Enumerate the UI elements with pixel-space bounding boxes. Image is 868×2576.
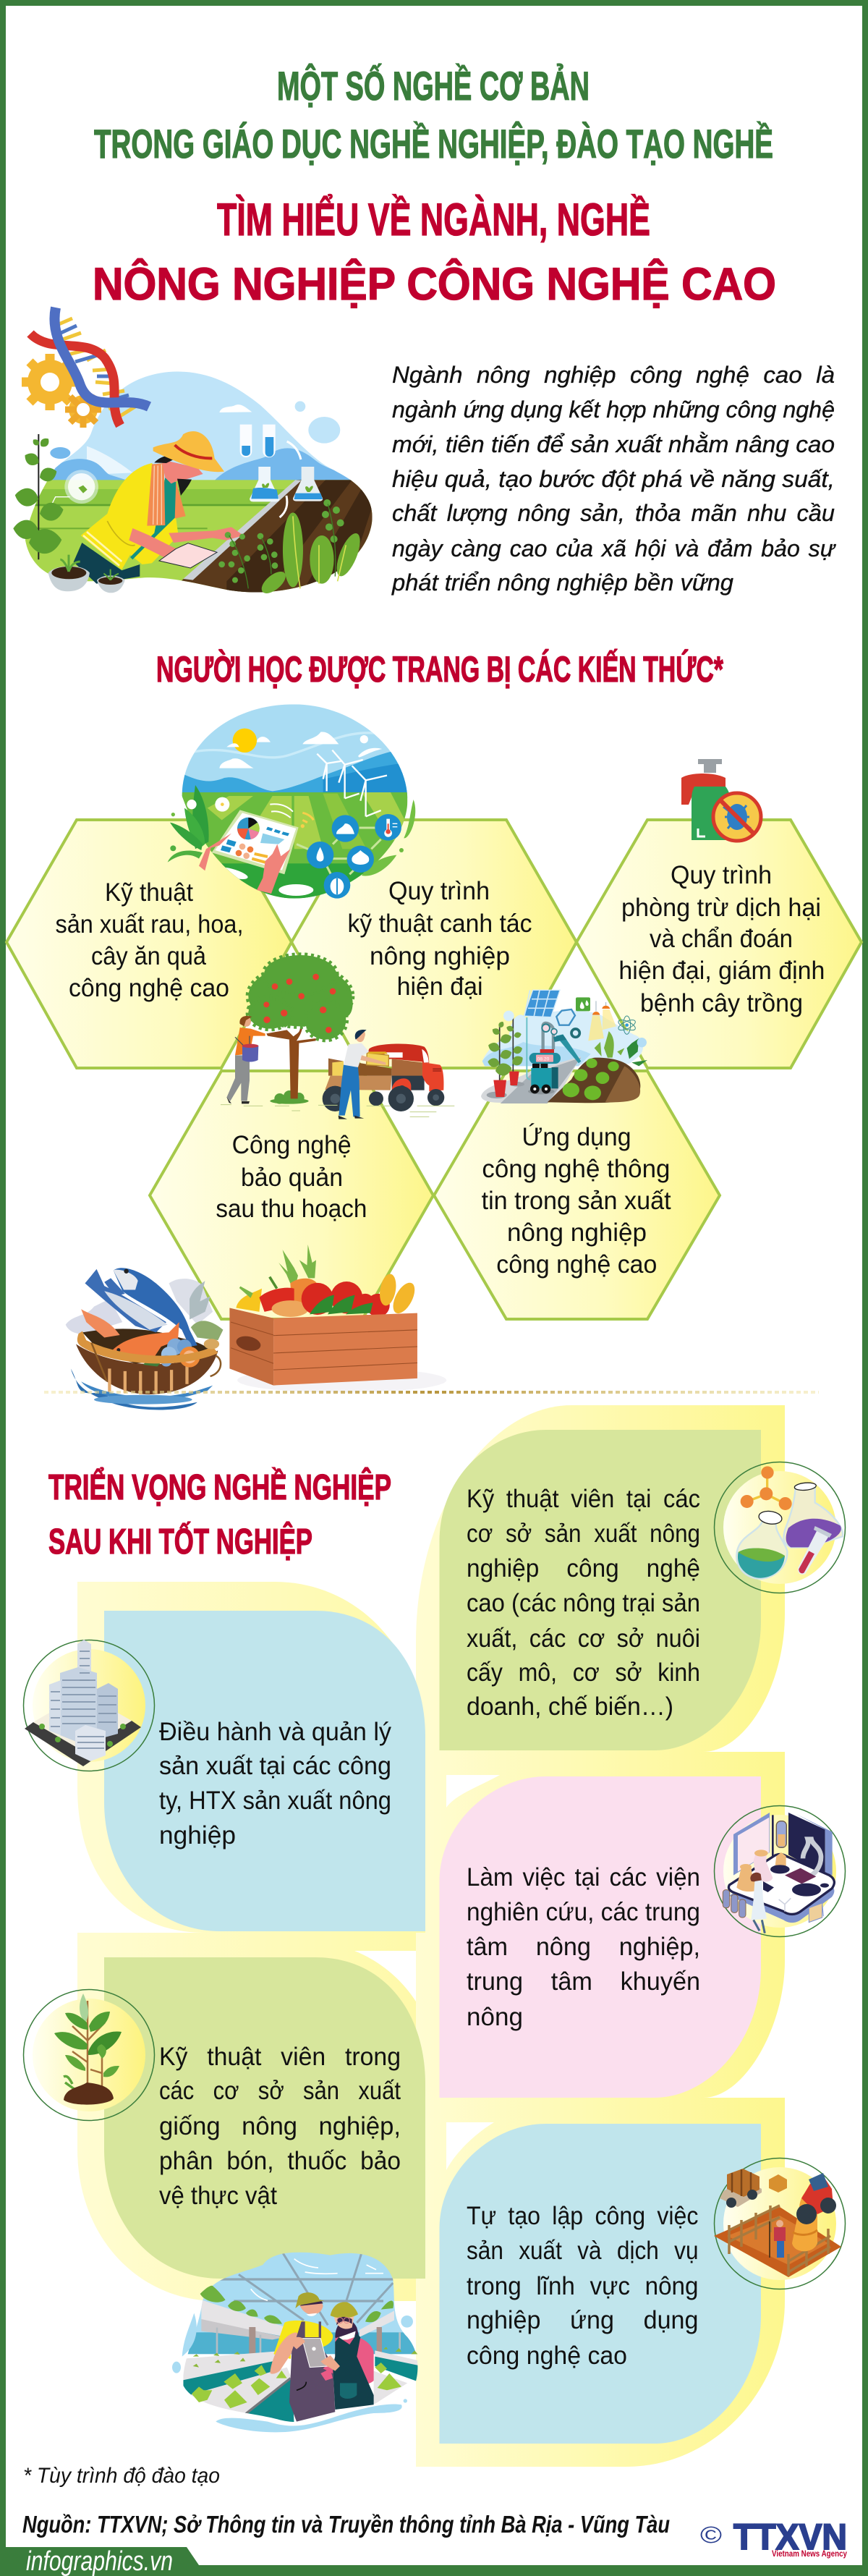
card: technician in seed and fertilizer production: giống nông nghiệp, (159, 2112, 401, 2140)
card: technician in seed and fertilizer production: các cơ sở sản xuất (159, 2077, 401, 2105)
card: technician at high-tech farms: doanh, chế biến…) (467, 1692, 673, 1721)
card: research institutes: trung tâm khuyến (467, 1967, 700, 1996)
card: management at companies: Điều hành và quản lý (159, 1718, 391, 1746)
hexagon: vegetables and fruit techniques: sản xuất rau, hoa, (55, 910, 243, 939)
hexagon: pest control and diagnosis: bệnh cây trồng (640, 989, 803, 1017)
hexagon: information technology application: tin trong sản xuất (482, 1187, 671, 1215)
card: management at companies: nghiệp (159, 1821, 236, 1850)
hexagon: modern cultivation process: kỹ thuật canh tác (347, 910, 532, 938)
hexagon: information technology application: Ứng dụng (522, 1123, 631, 1151)
card: technician at high-tech farms (416, 1405, 785, 1752)
illustration: two farmers in greenhouse (166, 2245, 427, 2432)
intro paragraph: phát triển nông nghiệp bền vững (391, 569, 733, 596)
heading: career prospects (48, 1467, 391, 1562)
hexagon: vegetables and fruit techniques: cây ăn quả (91, 942, 206, 970)
icon: young plant in soil (23, 1990, 155, 2120)
card: research institutes (416, 1752, 785, 2098)
card: self-employment: trong lĩnh vực nông (467, 2272, 699, 2300)
hexagon: modern cultivation process: Quy trình (388, 877, 490, 905)
hexagon: post-harvest preservation (150, 1071, 433, 1319)
intro paragraph: Ngành nông nghiệp công nghệ cao là (392, 362, 835, 388)
card: technician at high-tech farms: cơ sở sản xuất nông (467, 1520, 700, 1548)
intro paragraph: ngành ứng dụng kết hợp những công nghệ (392, 397, 835, 423)
hexagon: vegetables and fruit techniques: Kỹ thuật (105, 878, 193, 907)
intro paragraph: ngày càng cao của xã hội và đảm bảo sự (392, 535, 837, 562)
intro paragraph: chất lượng nông sản, thỏa mãn nhu cầu (392, 500, 835, 526)
illustration: smart farm globe with tablet and sensors (168, 705, 415, 899)
card: self-employment (416, 2098, 785, 2467)
card: self-employment: Tự tạo lập công việc (467, 2202, 699, 2230)
illustration: fruit tree, farmers and red truck (221, 955, 454, 1119)
gears (22, 354, 101, 428)
card: research institutes: tâm nông nghiệp, (467, 1933, 700, 1961)
title: TÌM HIỂU VỀ NGÀNH, NGHỀ (217, 194, 650, 245)
intro paragraph: hiệu quả, tạo bước đột phá về năng suất, (392, 466, 835, 492)
card: management at companies (77, 1582, 425, 1933)
card: self-employment: nghiệp ứng dụng (467, 2306, 699, 2334)
icon: spray bottle with no-pest sign (681, 759, 761, 841)
card: technician in seed and fertilizer production (77, 1933, 425, 2301)
card: technician in seed and fertilizer production: vệ thực vật (159, 2182, 277, 2210)
title: MỘT SỐ NGHỀ CƠ BẢN (277, 63, 590, 109)
logo: TTXVN: TTXVN (733, 2517, 847, 2557)
hexagon: information technology application (434, 1071, 720, 1319)
hexagon: pest control and diagnosis: Quy trình (671, 861, 772, 889)
card: technician at high-tech farms: cấy mô, cơ sở kinh (467, 1658, 700, 1687)
logo: TTXVN: © (700, 2522, 723, 2548)
card: research institutes: Làm việc tại các viện (467, 1863, 700, 1891)
intro paragraph: mới, tiên tiến để sản xuất nhằm nâng cao (392, 431, 835, 457)
icon: flasks and molecule (715, 1462, 845, 1593)
heading: career prospects: SAU KHI TỐT NGHIỆP (48, 1522, 312, 1562)
hexagon: post-harvest preservation: bảo quản (241, 1164, 343, 1192)
hexagon: information technology application: nông nghiệp (507, 1219, 647, 1247)
hexagon: post-harvest preservation: sau thu hoạch (216, 1195, 367, 1223)
icon: city buildings (23, 1640, 155, 1771)
dotted divider (44, 1391, 819, 1394)
illustration: farmer with DNA, gears and crops (12, 308, 381, 598)
card: self-employment: công nghệ cao (467, 2342, 627, 2370)
illustration: fish basket (66, 1268, 223, 1410)
card: technician in seed and fertilizer production: phân bón, thuốc bảo (159, 2147, 401, 2175)
intro paragraph (391, 362, 837, 596)
card: management at companies: sản xuất tại các công (159, 1752, 391, 1780)
hexagon: modern cultivation process (292, 820, 576, 1068)
title (93, 63, 776, 310)
footer band with site name (0, 2546, 868, 2576)
icon: farm with tractor and silo (714, 2158, 845, 2289)
hexagon: information technology application: công nghệ thông (482, 1155, 670, 1183)
source line: Nguồn: TTXVN; Sở Thông tin và Truyền thông tỉnh Bà Rịa - Vũng Tàu (22, 2511, 670, 2538)
hexagon: vegetables and fruit techniques: công nghệ cao (69, 974, 229, 1002)
card: self-employment: sản xuất và dịch vụ (467, 2237, 699, 2265)
card: technician at high-tech farms: nghiệp công nghệ (467, 1554, 700, 1583)
card: technician at high-tech farms: xuất, các cơ sở nuôi (467, 1624, 700, 1653)
hexagon: information technology application: công nghệ cao (496, 1250, 657, 1279)
card: management at companies: ty, HTX sản xuất nông (159, 1787, 391, 1815)
icon: laboratory (715, 1806, 845, 1936)
hexagon: modern cultivation process: nông nghiệp (370, 942, 510, 970)
title: NÔNG NGHIỆP CÔNG NGHỆ CAO (93, 258, 776, 310)
hexagon: pest control and diagnosis: phòng trừ dịch hại (621, 894, 821, 922)
hexagon: modern cultivation process: hiện đại (397, 973, 483, 1001)
illustration: robot garden with solar panel (481, 990, 647, 1103)
card: technician at high-tech farms: cao (các nông trại sản (467, 1589, 700, 1617)
hexagon: post-harvest preservation: Công nghệ (232, 1131, 352, 1159)
hexagon: pest control and diagnosis (576, 820, 861, 1068)
DNA (30, 308, 149, 425)
hexagon: vegetables and fruit techniques (7, 820, 292, 1068)
footnote: * Tùy trình độ đào tạo (23, 2464, 220, 2488)
hexagon: pest control and diagnosis: hiện đại, giám định (618, 957, 825, 985)
footer band with site name: infographics.vn (26, 2546, 173, 2576)
card: research institutes: nông (467, 2003, 523, 2031)
hexagon: pest control and diagnosis: và chẩn đoán (650, 925, 793, 953)
card: research institutes: nghiên cứu, các trung (467, 1898, 700, 1926)
heading: career prospects: TRIỂN VỌNG NGHỀ NGHIỆP (48, 1467, 391, 1507)
illustration: crate of vegetables (229, 1245, 446, 1393)
illustration: robot garden with solar panel: 08.20 (537, 1056, 550, 1062)
card: technician in seed and fertilizer production: Kỹ thuật viên trong (159, 2043, 401, 2071)
card: technician at high-tech farms: Kỹ thuật viên tại các (467, 1485, 700, 1513)
logo: TTXVN: Vietnam News Agency (772, 2549, 847, 2559)
